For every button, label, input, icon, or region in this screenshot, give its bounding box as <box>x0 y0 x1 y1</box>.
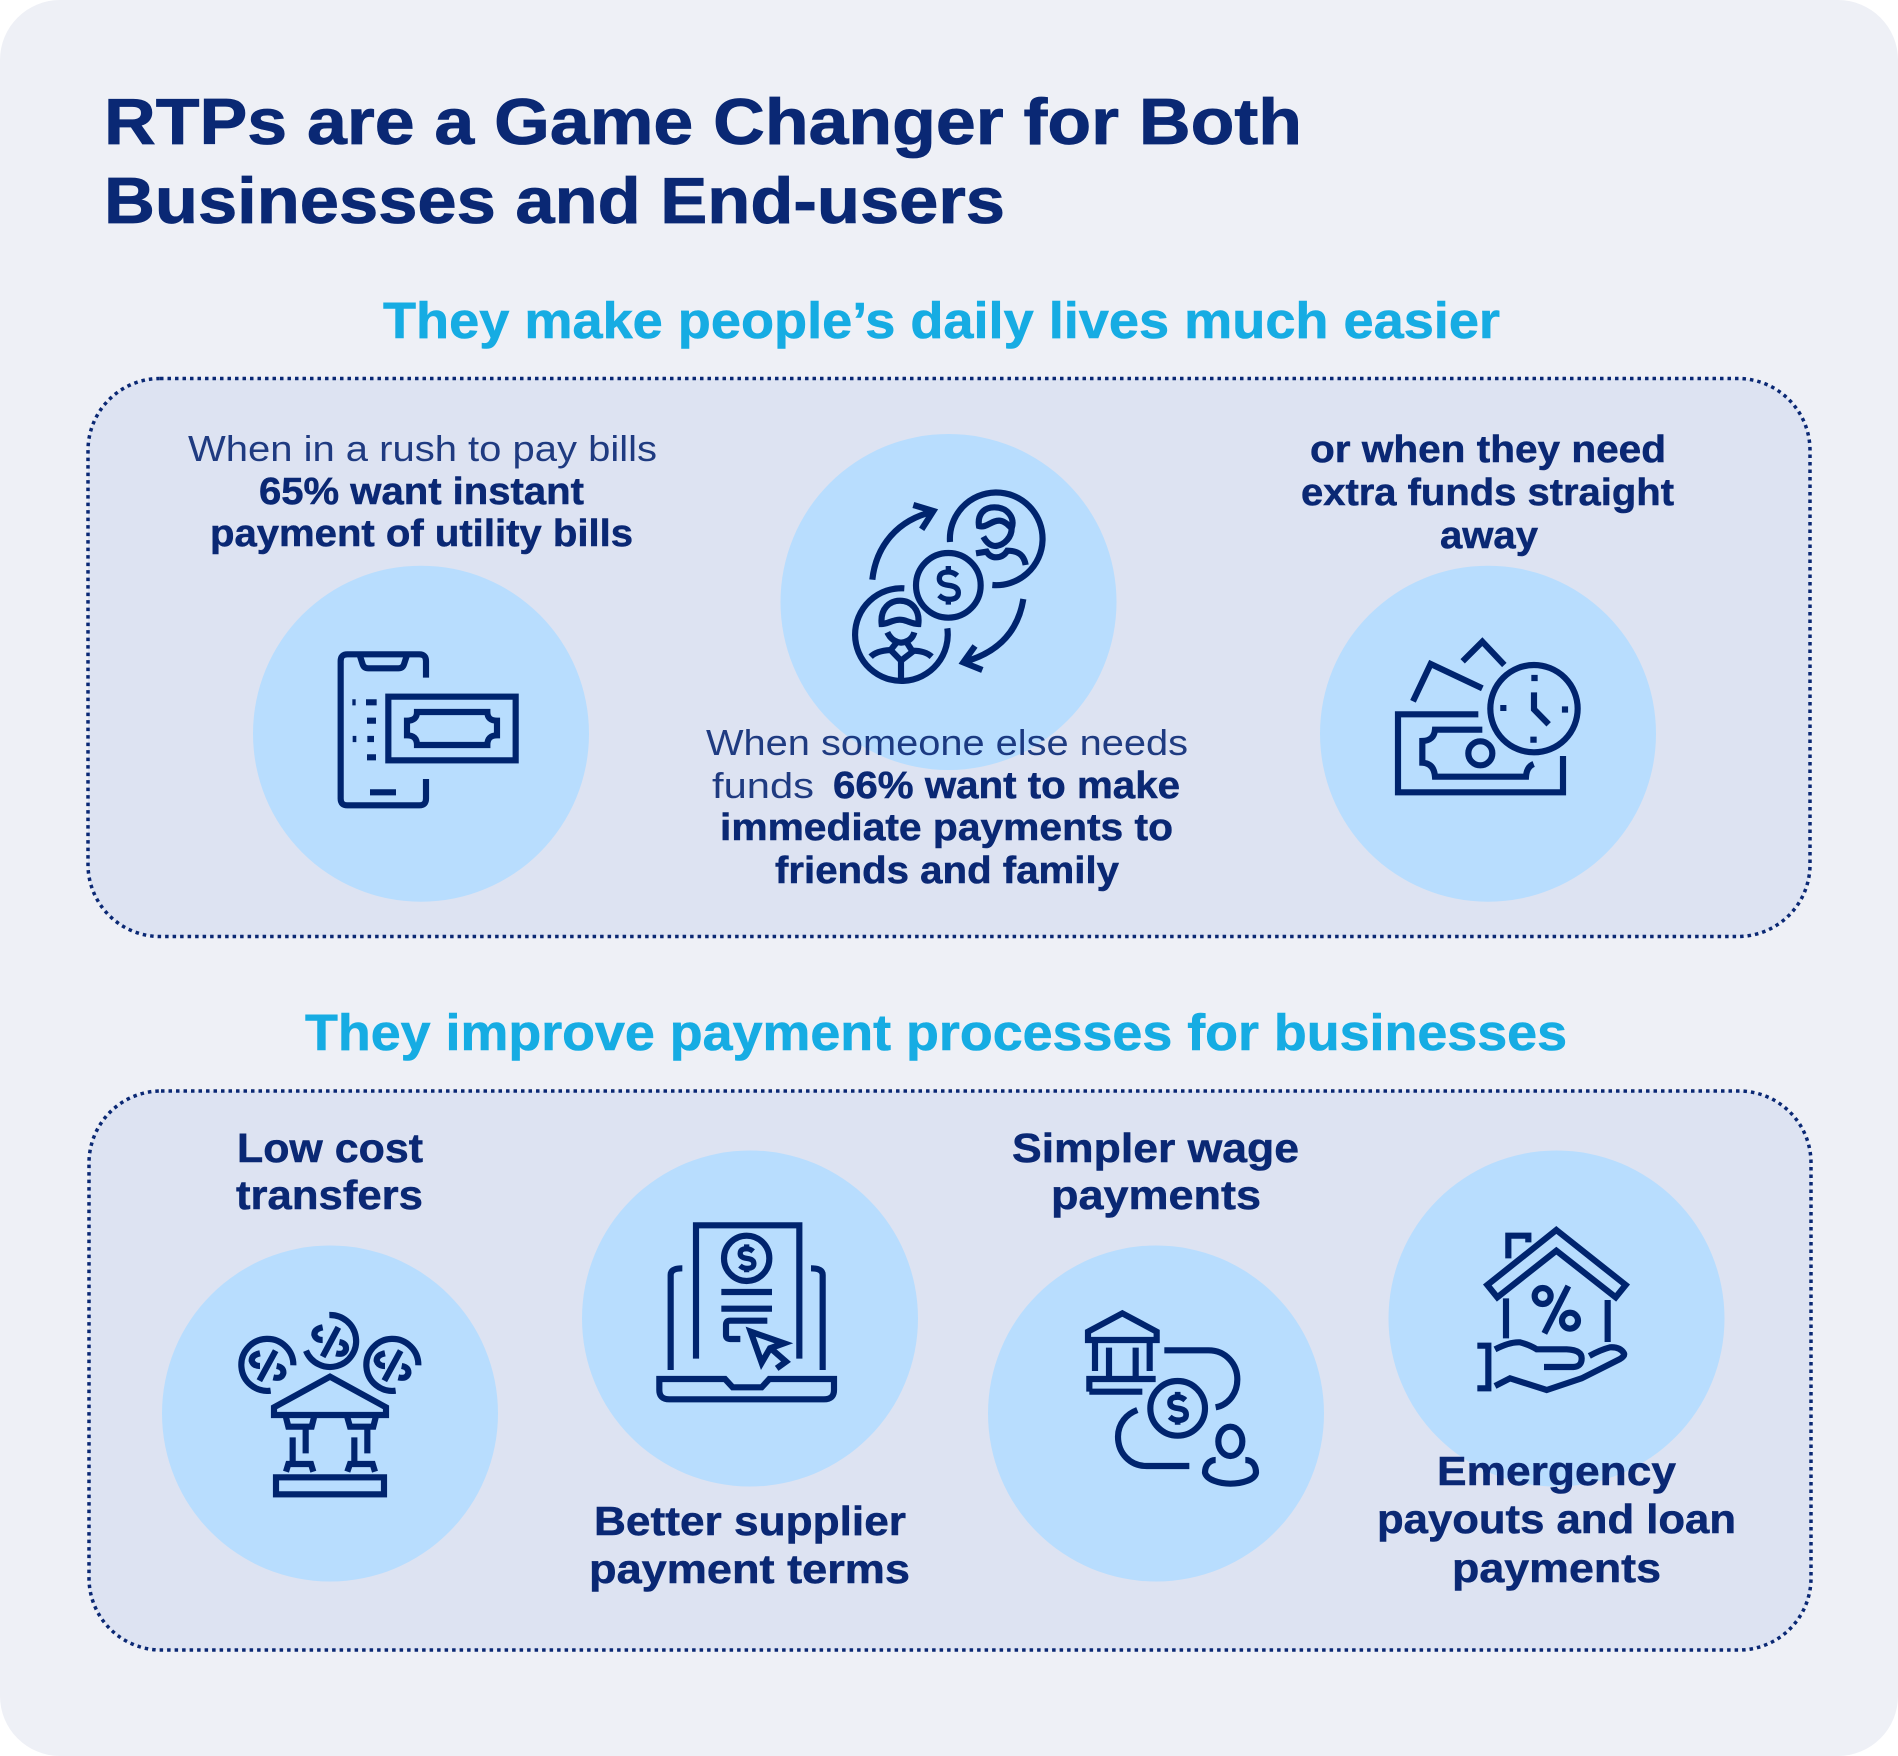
text: extra funds: away <box>1440 515 1538 557</box>
panel background <box>89 1091 1811 1650</box>
text: better supplier payment terms: payment terms <box>589 1546 910 1592</box>
text: friends and family: immediate payments to <box>720 807 1173 849</box>
item: emergency payouts and loan payments <box>1377 1150 1736 1591</box>
circle <box>1388 1150 1724 1486</box>
text: utility bills: payment of utility bills <box>210 513 633 555</box>
circle <box>253 566 589 902</box>
text: friends and family: funds <box>712 765 814 806</box>
text: friends and family: 66% want to make <box>833 765 1180 807</box>
circle <box>1320 566 1656 902</box>
text: better supplier payment terms <box>589 1498 910 1592</box>
item: utility bills <box>188 428 657 902</box>
icon: laptop with invoice <box>659 1225 834 1399</box>
text: friends and family <box>706 722 1188 892</box>
text: low cost transfers: Low cost <box>237 1125 423 1171</box>
text: emergency payouts and loan payments: payments <box>1452 1545 1661 1591</box>
icon: bank to person transfer <box>1088 1313 1256 1484</box>
text: simpler wage payments <box>1012 1125 1299 1218</box>
text: friends and family: friends and family <box>775 850 1119 892</box>
text: extra funds: extra funds straight <box>1301 472 1674 514</box>
text: utility bills: When in a rush to pay bills <box>188 428 657 469</box>
icon: bank with percent coins <box>241 1315 418 1494</box>
text: better supplier payment terms: Better supplier <box>594 1498 906 1544</box>
heading: businesses: They improve payment processes for businesses <box>305 1004 1567 1061</box>
title: RTPs are a Game Changer for Both <box>104 85 1302 158</box>
panel: businesses <box>89 1091 1811 1650</box>
heading: daily lives: They make people’s daily lives much easier <box>383 292 1500 349</box>
text: emergency payouts and loan payments <box>1377 1448 1736 1591</box>
panel background <box>88 378 1810 936</box>
text: utility bills: 65% want instant <box>259 471 584 513</box>
title <box>104 85 1302 237</box>
text: simpler wage payments: payments <box>1051 1172 1261 1218</box>
text: utility bills <box>188 428 657 555</box>
item: simpler wage payments <box>988 1125 1324 1582</box>
title: Businesses and End-users <box>104 164 1005 237</box>
text: simpler wage payments: Simpler wage <box>1012 1125 1299 1171</box>
text: emergency payouts and loan payments: Emergency <box>1437 1448 1676 1494</box>
icon: money and clock <box>1398 642 1578 792</box>
text: extra funds <box>1301 429 1674 557</box>
icon: people exchanging money <box>855 492 1043 681</box>
text: low cost transfers: transfers <box>236 1172 423 1218</box>
circle <box>162 1246 498 1582</box>
text: extra funds: or when they need <box>1310 429 1666 471</box>
text: friends and family: When someone else needs <box>706 722 1188 763</box>
circle <box>988 1246 1324 1582</box>
panel: people's daily lives <box>88 378 1810 936</box>
item: better supplier payment terms <box>582 1150 918 1592</box>
item: friends and family <box>706 434 1188 892</box>
item: extra funds <box>1301 429 1674 902</box>
text: low cost transfers <box>236 1125 423 1218</box>
icon: house with percent on hand <box>1477 1230 1626 1390</box>
circle <box>582 1150 918 1486</box>
circle <box>780 434 1116 770</box>
item: low cost transfers <box>162 1125 498 1582</box>
text: emergency payouts and loan payments: payouts and loan <box>1377 1496 1736 1542</box>
icon: phone with banknote <box>341 654 516 805</box>
